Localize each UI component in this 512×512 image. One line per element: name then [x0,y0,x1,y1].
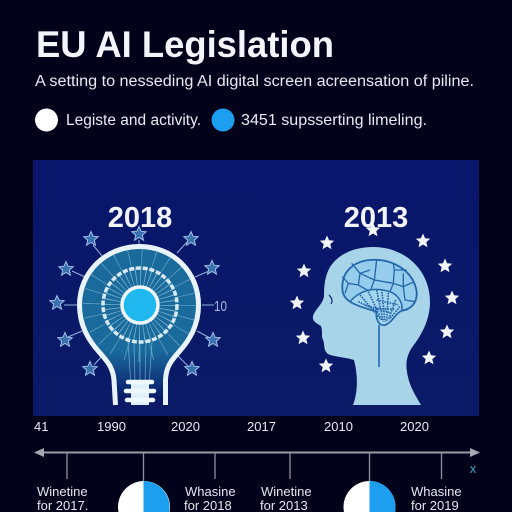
label: 10: 10 [214,298,227,315]
heading: 2018: 2018 [108,202,172,234]
milestone label 1: Winetine [37,484,88,499]
timeline axis [34,448,480,481]
brain stem [378,325,380,367]
bulb core [122,287,158,323]
year labels [34,419,429,434]
web folds [342,260,415,302]
legend item: legislative activity [35,108,201,132]
legend [35,108,427,132]
year labels: 2017 [247,419,276,434]
year labels: 2020 [400,419,429,434]
head silhouette [313,247,430,405]
bulb glass [80,246,198,405]
panel: illustrations [33,160,479,416]
legend item: supporting timeline [212,108,427,132]
title: EU AI Legislation [36,24,334,65]
legend item: supporting timeline: 3451 supsserting limeling. [241,112,427,129]
icon: light bulb with star ring [50,226,227,405]
milestone circle 1 [118,481,170,512]
year labels: 2020 [171,419,200,434]
star spokes [64,240,214,367]
stars [50,226,220,375]
milestone label 4: Whasine [411,484,462,499]
bulb base [126,380,154,405]
cerebellum [350,289,402,325]
year labels: 2010 [324,419,353,434]
year labels: 1990 [97,419,126,434]
filament rays [92,258,188,385]
eye [329,295,332,304]
icon: head with brain and star ring [290,222,459,405]
stars [290,222,459,372]
heading: 2013: 2013 [344,202,408,234]
milestone circle 2 [344,481,396,512]
milestone label 3: Winetine [261,484,312,499]
brain [342,260,417,325]
close mark: x [470,461,477,476]
subtitle: A setting to nesseding AI digital screen acreensation of piline. [35,73,474,90]
legend item: legislative activity: Legiste and activity. [66,112,201,129]
year labels: 41 [34,419,48,434]
milestone label 2: Whasine [185,484,236,499]
brain outline [342,260,417,325]
dashed ring [103,268,177,342]
